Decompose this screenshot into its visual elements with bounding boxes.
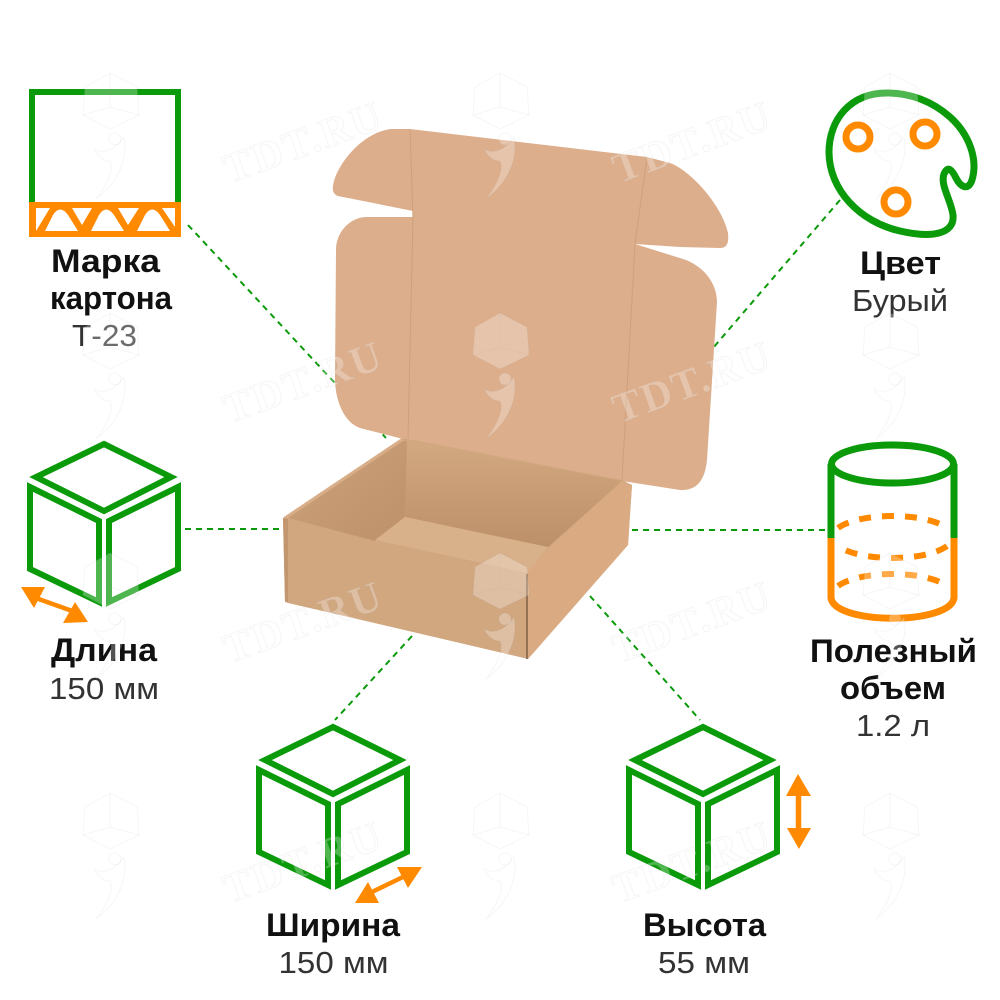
- inner left wall: [288, 441, 407, 541]
- watermarks: [83, 73, 919, 919]
- label: height: 55 мм: [658, 945, 750, 980]
- label: colour: [852, 245, 948, 318]
- watermarks: TDT.RU: [218, 333, 390, 433]
- watermarks: TDT.RU: [218, 93, 390, 193]
- box floor: [375, 517, 548, 573]
- watermarks: TDT.RU: [607, 333, 779, 433]
- watermarks: TDT.RU: [218, 573, 390, 673]
- inner back wall: [405, 441, 622, 547]
- top edge of left wall: [285, 439, 403, 518]
- watermarks: TDT.RU: [607, 573, 779, 673]
- label: cardboard grade: Марка: [51, 243, 160, 279]
- label: height: Высота: [643, 907, 766, 943]
- label: cardboard grade: картона: [50, 280, 172, 316]
- label: cardboard grade: [50, 243, 172, 353]
- lid fold lines: [408, 130, 647, 480]
- box lid with flaps: [333, 129, 728, 490]
- label: height: [643, 907, 766, 980]
- label: colour: Цвет: [860, 245, 941, 281]
- icon: colour palette: [829, 93, 974, 234]
- label: colour: Бурый: [852, 283, 948, 318]
- label: length: 150 мм: [49, 671, 159, 706]
- label: useful volume: 1.2 л: [856, 708, 930, 743]
- dashed leader lines: [185, 200, 840, 720]
- right face: [527, 481, 632, 659]
- icon: cube with width arrow: [259, 727, 422, 903]
- icon: corrugated cardboard grade: [29, 92, 181, 237]
- label: useful volume: объем: [840, 670, 946, 706]
- icon: cube with height arrow: [629, 727, 811, 885]
- label: width: [266, 907, 400, 980]
- watermarks: TDT.RU: [607, 813, 779, 913]
- watermarks: TDT.RU: [218, 813, 390, 913]
- label: width: 150 мм: [278, 945, 388, 980]
- label: cardboard grade: Т-23: [72, 318, 137, 353]
- icon: cylinder useful volume: [831, 445, 954, 618]
- label: length: [49, 632, 159, 706]
- label: length: Длина: [51, 632, 157, 668]
- front corner seam: [526, 574, 528, 659]
- label: width: Ширина: [266, 907, 400, 943]
- label: useful volume: [810, 633, 977, 743]
- photo: open kraft cardboard box: [283, 129, 728, 659]
- left end tab: [283, 518, 288, 603]
- watermarks: TDT.RU: [607, 93, 779, 193]
- front face: [288, 519, 527, 658]
- icon: cube with length arrow: [21, 444, 178, 623]
- box body base: [283, 438, 632, 659]
- label: useful volume: Полезный: [810, 633, 977, 669]
